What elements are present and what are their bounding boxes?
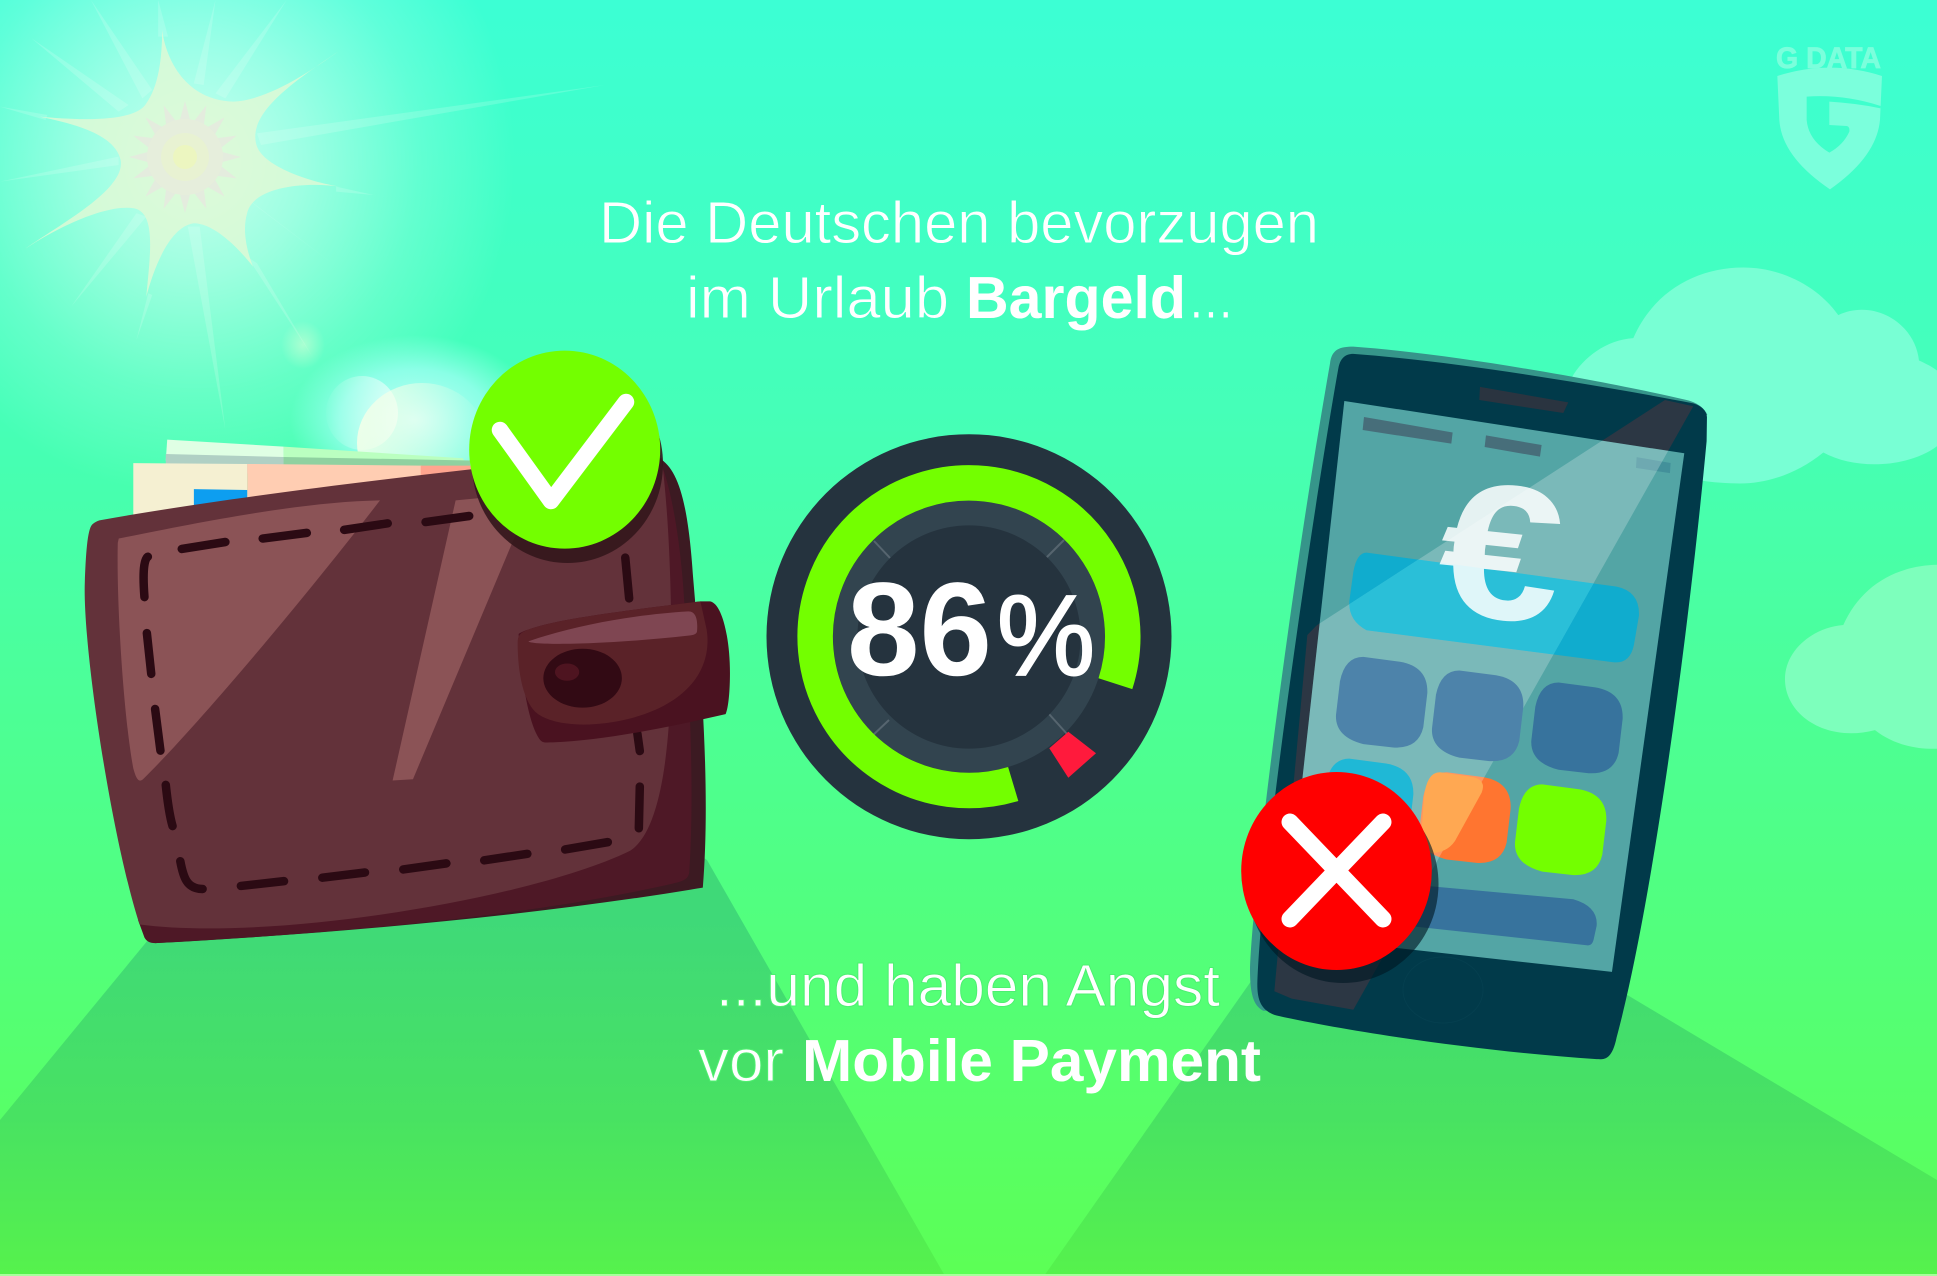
icon: check mark <box>500 402 626 501</box>
app icon 4 <box>1322 759 1413 849</box>
logo shield <box>1777 68 1882 189</box>
gauge ticks <box>871 540 1067 737</box>
logo: G DATA <box>1776 42 1882 189</box>
app icon 6 <box>1515 784 1606 875</box>
cross badge <box>1241 772 1438 983</box>
phone speaker <box>1479 387 1568 413</box>
headline top <box>599 190 1319 331</box>
cloud: upper right <box>1572 268 1937 483</box>
gauge value: 86 <box>847 556 992 704</box>
headline line 4 regular: vor <box>698 1028 784 1094</box>
check badge shadow <box>472 365 663 563</box>
gauge green arc <box>815 483 1123 791</box>
wallet body <box>85 458 706 943</box>
headline line 2 dots: ... <box>1189 265 1233 331</box>
gauge red marker <box>1049 732 1096 778</box>
gauge inner ring <box>833 501 1105 773</box>
phone screen <box>1285 401 1684 972</box>
headline line 1: Die Deutschen bevorzugen <box>599 190 1319 256</box>
cross badge shadow <box>1248 785 1438 983</box>
wallet highlights <box>118 500 380 781</box>
mountain: left <box>0 650 945 1276</box>
icon: cross mark <box>1290 822 1383 919</box>
lens flare glow <box>290 335 540 505</box>
headline line 2 regular: im Urlaub <box>686 265 949 331</box>
cloud: lower right <box>1785 565 1937 749</box>
bottom bar <box>1387 882 1597 945</box>
clasp highlight <box>528 611 697 644</box>
phone body <box>1257 354 1707 1059</box>
sun core spikes <box>129 101 241 213</box>
logo wordmark: G DATA <box>1776 42 1881 75</box>
gauge percent sign: % <box>997 573 1095 700</box>
phone back edge <box>1250 347 1707 1011</box>
status bars <box>1363 417 1671 473</box>
wallet clasp <box>518 601 730 742</box>
headline bottom <box>698 953 1261 1094</box>
check badge <box>469 351 663 563</box>
cross badge circle <box>1241 772 1432 970</box>
wallet <box>85 440 730 943</box>
phone screen contents <box>1274 400 1693 1010</box>
headline line 3: ...und haben Angst <box>716 953 1220 1019</box>
gauge inner disc <box>857 525 1081 749</box>
sun rays <box>0 0 605 430</box>
orange reflection <box>1420 772 1483 853</box>
app icon 3 <box>1531 683 1623 773</box>
app icon 2 <box>1432 670 1523 761</box>
screen reflection <box>1302 440 1668 870</box>
wallet stitching <box>144 516 640 889</box>
app icon 1 <box>1336 657 1427 748</box>
mountain: right <box>1044 833 1937 1276</box>
lens flare blob <box>281 321 325 369</box>
phone glass shadow on body <box>1274 400 1693 1010</box>
sun glow <box>0 0 515 495</box>
icon: euro sign: € <box>1429 439 1573 665</box>
phone home button <box>1403 957 1483 1023</box>
check badge circle <box>469 351 660 549</box>
lens flare circle left <box>326 376 398 450</box>
headline line 2 bold: Bargeld <box>966 265 1186 331</box>
headline line 4 bold: Mobile Payment <box>802 1028 1261 1094</box>
clasp button <box>543 649 622 708</box>
app icon 5 <box>1419 772 1511 863</box>
gauge chart: 86 percent <box>766 434 1172 839</box>
gauge outer disc <box>766 434 1172 839</box>
payment banner <box>1349 553 1639 662</box>
sun with rays and lens flare <box>0 0 605 505</box>
banner under reflection <box>1349 560 1594 654</box>
banknotes <box>133 440 475 526</box>
smartphone <box>1250 347 1707 1059</box>
bottom edge line <box>0 1274 1937 1276</box>
sun star <box>24 30 340 297</box>
lens flare circle right <box>357 383 487 503</box>
